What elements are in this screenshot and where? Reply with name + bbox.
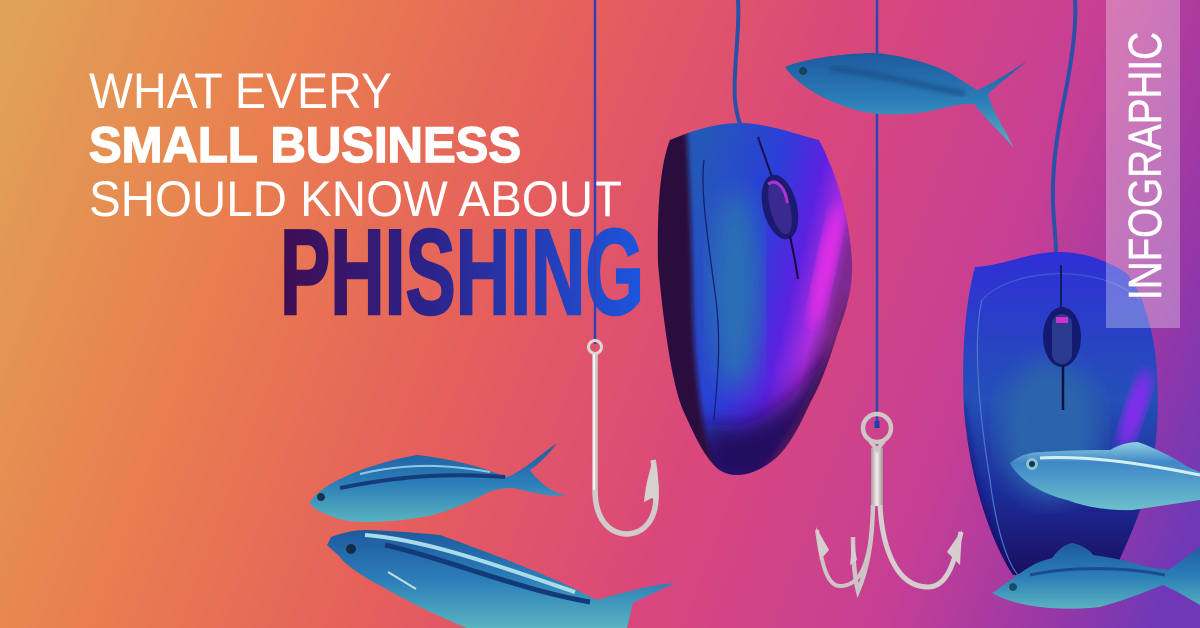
slot line lower (790, 236, 798, 279)
fishing line: center hook (876, 0, 878, 422)
fish: bottom left (327, 530, 675, 628)
scroll wheel (756, 171, 804, 243)
fishing line: left hook (594, 0, 596, 344)
slot line upper (758, 137, 773, 180)
hook: single (588, 340, 659, 534)
headline text (89, 63, 622, 227)
slot line lower (1062, 366, 1064, 410)
mouse cable: left (735, 0, 740, 124)
line: small business: SMALL BUSINESS (89, 117, 521, 173)
line: what every: WHAT EVERY (89, 63, 392, 119)
hook: treble (816, 414, 962, 591)
word: phishing: PHISHING (280, 204, 644, 340)
fish: left middle (310, 443, 566, 522)
fish: right lower (992, 543, 1200, 609)
fish: top (785, 53, 1027, 148)
mouse cable: right (1053, 0, 1075, 252)
scroll wheel (1043, 307, 1081, 367)
fish: right upper (1010, 442, 1200, 510)
line: should know about: SHOULD KNOW ABOUT (89, 171, 622, 227)
mouse: left (658, 123, 852, 475)
slot line upper (1060, 265, 1062, 310)
mouse: right (963, 252, 1158, 575)
label band (1106, 0, 1180, 328)
